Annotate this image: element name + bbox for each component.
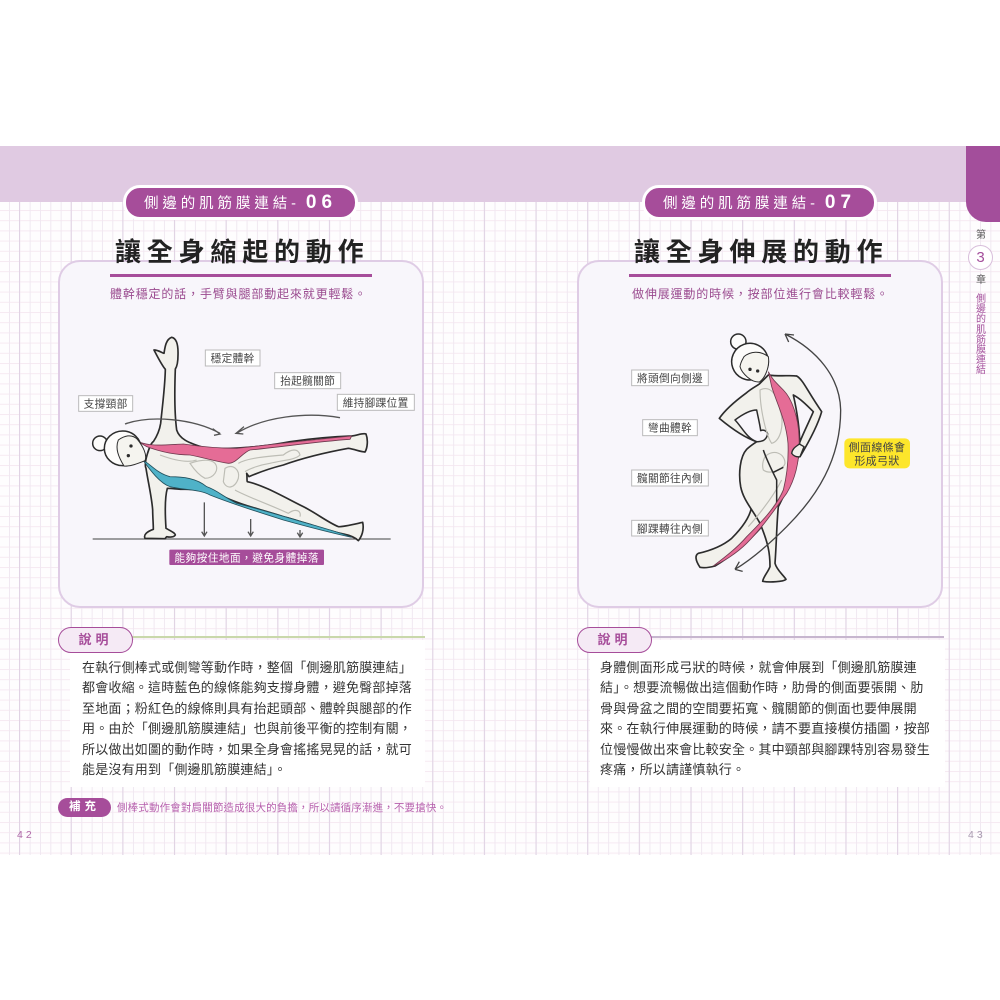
label: ankle inward: 腳踝轉往內側 <box>637 522 703 535</box>
left subtitle: 體幹穩定的話，手臂與腿部動起來就更輕鬆。 <box>110 287 367 301</box>
label: ankle inward <box>632 520 708 536</box>
callout: bow shape: 形成弓狀 <box>854 453 900 467</box>
illustration: side plank figure <box>78 336 415 565</box>
chapter title vertical: 側 <box>976 294 986 305</box>
chapter label bottom: 章 <box>976 275 986 286</box>
label: stabilize trunk <box>205 350 260 366</box>
right page number: 43 <box>968 829 986 841</box>
chapter title vertical: 連 <box>976 355 986 366</box>
label: hold ankle: 維持腳踝位置 <box>343 396 409 409</box>
arrows <box>125 415 340 537</box>
inner arm gap and hand <box>735 410 768 442</box>
muscle line: blue <box>143 461 352 537</box>
panel: right illustration <box>577 260 943 608</box>
front hand <box>792 444 804 457</box>
head <box>727 334 773 385</box>
chapter title vertical: 膜 <box>976 345 986 356</box>
head <box>93 431 146 466</box>
supplement tag: 補充 <box>69 801 100 813</box>
left title: 讓全身縮起的動作 <box>115 237 369 267</box>
chapter label top: 第 <box>976 230 986 241</box>
chapter number circle <box>968 245 993 270</box>
bow arrow <box>735 334 841 571</box>
supplement tag <box>58 798 111 817</box>
left explanation tag: 說明 <box>78 632 112 647</box>
right section badge: 側邊的肌筋膜連結- 07 <box>663 192 856 213</box>
illustration: standing side bend figure <box>631 333 910 583</box>
chapter title vertical: 的 <box>976 314 986 325</box>
left explanation text: 在執行側棒式或側彎等動作時，整個「側邊肌筋膜連結」 都會收縮。這時藍色的線條能夠支撐身體，避免臀部掉落 至地面；粉紅色的線條則具有抬起頭部、體幹與腿部的作 用。由於「側邊肌筋膜連結」也與前後平衡的控制有關， 所以做出如圖的動作時，如果全身會搖搖晃晃的話，就可 能是沒有用到「側邊肌筋膜連結」。 <box>82 660 412 777</box>
label: hold ankle <box>337 394 414 410</box>
chapter title vertical: 邊 <box>976 304 986 315</box>
chapter title vertical: 筋 <box>976 335 986 346</box>
label: hip inward <box>632 470 708 486</box>
left section badge <box>123 185 358 220</box>
label: support neck: 支撐頸部 <box>84 398 128 411</box>
header band <box>0 146 1000 202</box>
right explanation tag <box>577 627 652 653</box>
ground line <box>93 537 391 541</box>
label: bend trunk: 彎曲體幹 <box>648 422 692 435</box>
chapter number circle: 3 <box>976 249 985 266</box>
chapter title vertical: 結 <box>976 365 986 376</box>
body outline <box>719 375 822 582</box>
right subtitle: 做伸展運動的時候，按部位進行會比較輕鬆。 <box>632 287 889 301</box>
label: raise hip <box>275 373 341 389</box>
left title underline <box>110 274 372 277</box>
label: tilt head <box>632 370 708 386</box>
muscle line: pink <box>138 436 352 463</box>
back leg <box>696 507 763 568</box>
right section badge <box>642 185 877 220</box>
skeleton lines <box>748 389 785 530</box>
left page number: 42 <box>17 829 35 841</box>
chapter title vertical: 肌 <box>976 325 986 336</box>
body outline <box>145 337 367 541</box>
label: tilt head: 將頭倒向側邊 <box>637 372 703 385</box>
muscle line: pink <box>713 372 799 566</box>
left explanation box <box>70 640 425 787</box>
right title: 讓全身伸展的動作 <box>634 237 888 267</box>
label: bend trunk <box>643 420 697 436</box>
front hip contour <box>763 450 783 507</box>
right explanation tag: 說明 <box>597 632 632 647</box>
label: support neck <box>79 396 133 411</box>
label: stabilize trunk: 穩定體幹 <box>211 352 255 365</box>
chapter marker <box>968 229 993 376</box>
right explanation box <box>590 640 945 787</box>
panel: left illustration <box>58 260 424 608</box>
right explanation rule <box>648 636 944 638</box>
chapter title vertical <box>976 293 986 376</box>
right explanation text: 身體側面形成弓狀的時候，就會伸展到「側邊肌筋膜連 結」。想要流暢做出這個動作時，肋骨的側面要張開、肋 骨與骨盆之間的空間要拓寬、髖關節的側面也要伸展開 來。在執行伸展運動的時候，請不要直接模仿插圖，按部 位慢慢做出來會比較安全。其中頸部與腳踝特別容易發生 疼痛，所以請謹慎執行。 <box>600 660 930 777</box>
left explanation tag <box>58 627 133 653</box>
skeleton lines <box>160 450 300 517</box>
left section badge: 側邊的肌筋膜連結- 06 <box>144 192 337 213</box>
chapter tab <box>966 146 1000 222</box>
right title underline <box>629 274 891 277</box>
label: raise hip: 抬起髖關節 <box>280 375 335 388</box>
callout: press floor: 能夠按住地面，避免身體掉落 <box>174 551 319 564</box>
left explanation rule <box>130 636 425 638</box>
callout: bow shape <box>844 438 910 468</box>
label: hip inward: 髖關節往內側 <box>637 472 703 485</box>
supplement note: 側棒式動作會對肩關節造成很大的負擔，所以請循序漸進，不要搶快。 <box>117 802 447 814</box>
callout: bow shape: 側面線條會 <box>849 440 905 454</box>
